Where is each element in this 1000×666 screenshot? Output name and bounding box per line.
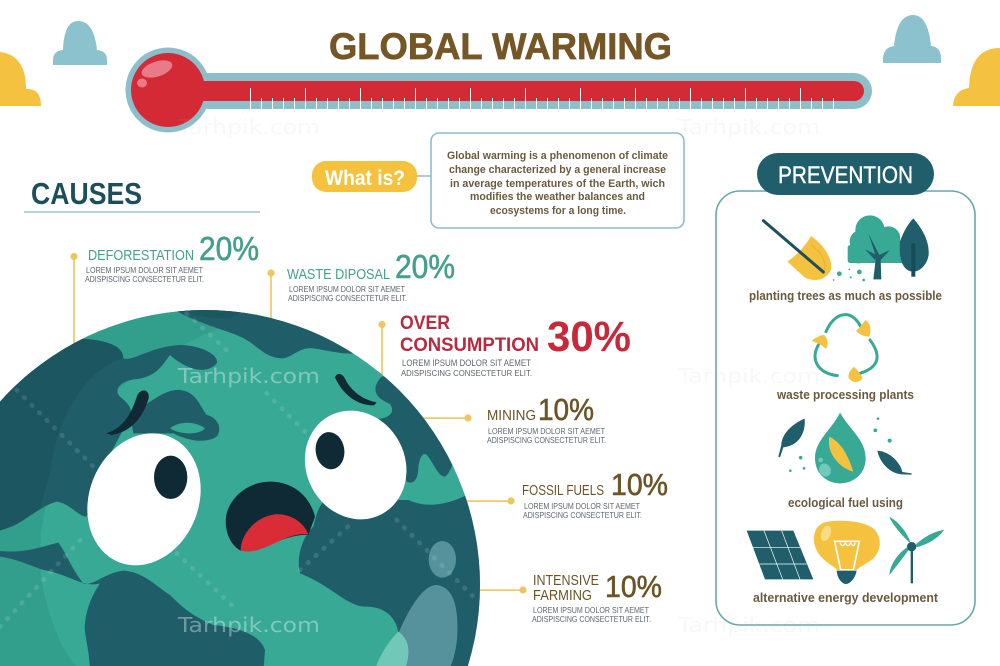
icon: fuel drop with leaves <box>778 413 912 483</box>
title: GLOBAL WARMING <box>329 26 672 67</box>
icon: blue cloud left <box>53 21 107 65</box>
watermarks: Tarhpik.com <box>177 364 320 388</box>
cause: deforestation: 20% <box>199 230 259 267</box>
icon: solar panel <box>747 531 813 579</box>
icon: light bulb <box>814 521 880 584</box>
cause: fossil fuels: FOSSIL FUELS <box>522 483 604 499</box>
thermometer <box>126 48 872 132</box>
cause: over consumption <box>400 313 631 378</box>
icon: recycling arrows <box>812 315 877 382</box>
definition box: modifies the weather balances and <box>470 191 645 203</box>
cause: intensive farming <box>532 569 662 624</box>
cause: over consumption: ADISPISCING CONSECTETUR ELIT. <box>401 368 532 378</box>
icon: trees <box>833 215 929 281</box>
icon: shovel <box>763 221 831 280</box>
watermarks: Tarhpik.com <box>677 613 820 637</box>
mouth <box>226 482 315 552</box>
watermarks: Tarhpik.com <box>677 115 820 139</box>
cause: intensive farming: LOREM IPSUM DOLOR SIT AEMET <box>533 605 650 615</box>
cause: waste diposal: LOREM IPSUM DOLOR SIT AEMET <box>289 284 406 294</box>
left eye <box>68 416 220 583</box>
definition box: Global warming is a phenomenon of climate <box>447 150 668 162</box>
heading: causes: CAUSES <box>31 176 142 211</box>
cause: deforestation: LOREM IPSUM DOLOR SIT AEMET <box>86 265 204 275</box>
cause: waste diposal: ADISPISCING CONSECTETUR ELIT. <box>288 293 407 303</box>
cause: over consumption: OVER <box>400 313 450 334</box>
cause: fossil fuels <box>522 467 668 520</box>
icon: yellow cloud left <box>0 52 41 106</box>
right eye <box>286 393 425 537</box>
label: ecological fuel: ecological fuel using <box>788 495 903 510</box>
eyebrows <box>106 374 377 435</box>
definition box <box>431 133 684 228</box>
label: planting trees: planting trees as much as possible <box>749 288 942 303</box>
heading: prevention <box>757 153 934 195</box>
icon: blue cloud right <box>883 15 941 63</box>
cause: intensive farming: FARMING <box>533 588 592 604</box>
icon: yellow cloud right <box>953 48 1000 106</box>
definition box: in average temperatures of the Earth, wich <box>450 178 665 190</box>
cause: deforestation: ADISPISCING CONSECTETUR ELIT. <box>85 274 204 284</box>
cause: intensive farming: INTENSIVE <box>533 573 599 589</box>
cause: over consumption: 30% <box>547 313 631 361</box>
cause: over consumption: LOREM IPSUM DOLOR SIT AEMET <box>402 358 531 368</box>
badge: what is: What is? <box>325 167 405 190</box>
connector: what is <box>415 175 432 177</box>
cause: mining: MINING <box>487 408 536 424</box>
cause: waste diposal: 20% <box>395 248 455 285</box>
cause: fossil fuels: 10% <box>611 467 668 502</box>
cause: mining <box>487 392 606 445</box>
cause: fossil fuels: LOREM IPSUM DOLOR SIT AEMET <box>524 501 641 511</box>
connector lines <box>70 253 527 594</box>
watermarks: Tarhpik.com <box>677 364 820 388</box>
panel: prevention <box>716 191 975 625</box>
cause: mining: LOREM IPSUM DOLOR SIT AEMET <box>488 426 606 436</box>
watermarks: Tarhpik.com <box>177 115 320 139</box>
cause: waste diposal <box>287 248 455 303</box>
label: alternative energy: alternative energy development <box>753 590 939 605</box>
definition box: ecosystems for a long time. <box>490 205 626 217</box>
watermarks: Tarhpik.com <box>177 613 320 637</box>
cause: over consumption: CONSUMPTION <box>400 335 539 356</box>
darker atmosphere crescent <box>0 310 258 666</box>
cause: deforestation <box>85 230 259 284</box>
cause: mining: 10% <box>538 392 594 427</box>
cause: fossil fuels: ADISPISCING CONSECTETUR ELIT. <box>523 510 642 520</box>
definition box: change characterized by a general increase <box>449 164 666 176</box>
cause: waste diposal: WASTE DIPOSAL <box>287 267 390 283</box>
globe character <box>0 300 517 666</box>
badge: what is <box>312 161 417 192</box>
heading: prevention: PREVENTION <box>778 162 913 189</box>
cause: mining: ADISPISCING CONSECTETUR ELIT. <box>487 435 606 445</box>
watermarks <box>177 115 820 637</box>
cause: deforestation: DEFORESTATION <box>88 248 194 264</box>
cause: intensive farming: 10% <box>605 569 662 604</box>
cause: intensive farming: ADISPISCING CONSECTETUR ELIT. <box>532 614 651 624</box>
label: waste processing: waste processing plants <box>776 387 914 402</box>
icon: wind turbine <box>889 517 944 583</box>
